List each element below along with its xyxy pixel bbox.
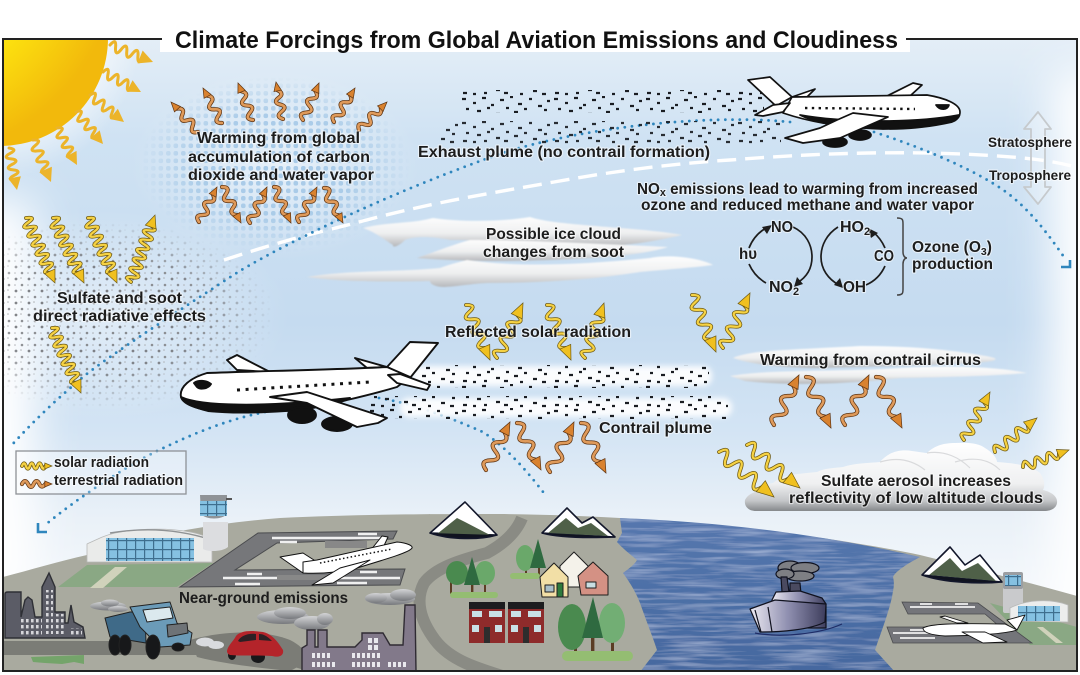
label: NOx emissions: x bbox=[660, 187, 667, 199]
dump truck bbox=[105, 602, 192, 659]
double arrow: stratosphere and troposphere bbox=[1024, 112, 1051, 204]
label: ozone production: production bbox=[912, 256, 993, 273]
right airport plane bbox=[923, 615, 1025, 643]
exhaust plume (no contrail) particles bbox=[441, 90, 781, 144]
right airport grass strip bbox=[1037, 627, 1063, 643]
runway bbox=[180, 531, 405, 587]
label: NOx emissions: ozone and reduced methane and water vapor bbox=[641, 197, 974, 214]
label: ozone production bbox=[912, 239, 993, 273]
label: sulfate and soot bbox=[33, 290, 206, 325]
label: carbon dioxide warming: Warming from global bbox=[197, 130, 360, 147]
airplane: on runway, taking off bbox=[277, 536, 412, 585]
label: near-ground emissions: Near-ground emissions bbox=[179, 590, 348, 607]
label: carbon dioxide warming: dioxide and water vapor bbox=[188, 167, 374, 184]
grass by city bbox=[31, 655, 84, 664]
chemistry cycle: NOx and HOx ozone production: OH bbox=[843, 279, 866, 296]
legend text: solar radiation: solar radiation bbox=[54, 455, 149, 471]
arrows: solar radiation through sulfate and soot bbox=[21, 213, 160, 395]
bracket bbox=[897, 218, 907, 295]
cloud: low altitude reflective cloud bbox=[745, 443, 1057, 511]
chemistry cycle: NOx and HOx ozone production bbox=[739, 219, 894, 298]
trees: group near road bbox=[446, 557, 498, 598]
city skyline bbox=[5, 573, 85, 638]
mountain bbox=[922, 547, 1002, 583]
label: contrail plume: Contrail plume bbox=[599, 420, 712, 437]
chemistry cycle: NOx and HOx ozone production: CO bbox=[874, 248, 894, 265]
legend bbox=[16, 451, 186, 494]
label: sulfate aerosol: reflectivity of low altitude clouds bbox=[789, 490, 1043, 507]
smoke: factory stacks bbox=[257, 607, 333, 630]
smoke: truck bbox=[90, 600, 128, 612]
control tower bbox=[200, 495, 232, 551]
factory bbox=[302, 605, 416, 671]
label: sulfate and soot: Sulfate and soot bbox=[57, 290, 182, 307]
arrows: terrestrial radiation at contrail cirrus bbox=[769, 372, 907, 431]
trees: group by shore bbox=[558, 597, 633, 661]
cloud: possible ice cloud changes bbox=[307, 217, 713, 287]
arrows: terrestrial warming above carbon dioxide text bbox=[168, 81, 390, 135]
label: sulfate aerosol bbox=[789, 473, 1043, 507]
pale glow behind halftones bbox=[0, 70, 420, 420]
legend text: terrestrial radiation: terrestrial radiation bbox=[54, 473, 183, 489]
sun rays bbox=[3, 39, 156, 191]
airplane: lower left bbox=[181, 342, 438, 431]
label: ice cloud changes: Possible ice cloud bbox=[486, 226, 621, 243]
right airport grass bbox=[990, 603, 1077, 645]
label: ozone production: Ozone (O bbox=[912, 239, 981, 256]
label: exhaust plume: Exhaust plume (no contrail formation) bbox=[418, 144, 710, 161]
label: stratosphere: Stratosphere bbox=[988, 134, 1072, 150]
red car bbox=[227, 631, 283, 663]
ground bbox=[3, 514, 1077, 672]
chemistry cycle: NOx and HOx ozone production: 2 bbox=[864, 226, 870, 238]
label: reflected solar radiation: Reflected solar radiation bbox=[445, 324, 631, 341]
chemistry cycle: NOx and HOx ozone production: NO bbox=[771, 219, 793, 236]
right airport runway bbox=[887, 602, 1032, 643]
label: troposphere: Troposphere bbox=[989, 167, 1071, 183]
smoke: car bbox=[196, 638, 224, 649]
label: ozone production: ) bbox=[987, 239, 992, 256]
halftone: carbon dioxide and water vapor bbox=[152, 84, 396, 246]
chemistry cycle: NOx and HOx ozone production: 2 bbox=[793, 286, 799, 298]
dotted transport path: lower plane to ground bbox=[379, 398, 547, 497]
label: carbon dioxide warming: accumulation of carbon bbox=[188, 149, 370, 166]
halftone: sulfate and soot bbox=[4, 224, 268, 406]
arrows: reflected solar radiation bbox=[460, 290, 756, 362]
chemistry cycle: NOx and HOx ozone production: NO bbox=[769, 279, 793, 296]
right airport tower bbox=[1003, 572, 1023, 613]
label: NOx emissions: emissions lead to warming from increased bbox=[666, 181, 978, 198]
dotted transport path: upper plane to upper left bbox=[10, 120, 790, 447]
legend key: terrestrial radiation bbox=[22, 481, 52, 487]
chemistry cycle: NOx and HOx ozone production: hυ bbox=[739, 246, 757, 263]
sun bbox=[4, 40, 118, 164]
mountain bbox=[542, 508, 615, 538]
chemistry cycle: NOx and HOx ozone production: HO bbox=[840, 219, 864, 236]
airport grass bbox=[58, 563, 213, 588]
label: contrail cirrus: Warming from contrail cirrus bbox=[760, 352, 981, 369]
dotted transport path: lower plane to lower left, with arrow bbox=[38, 412, 265, 532]
title: Climate Forcings from Global Aviation Emissions and Cloudiness bbox=[175, 27, 898, 54]
arrows: solar radiation reflected from low clouds bbox=[959, 389, 1071, 472]
road bbox=[3, 518, 522, 675]
airplane: upper right bbox=[748, 77, 960, 147]
ocean bbox=[617, 518, 920, 672]
label: ozone production: 3 bbox=[981, 246, 987, 258]
label: sulfate and soot: direct radiative effects bbox=[33, 308, 206, 325]
dotted transport path: upper plane to right, with arrow bbox=[874, 132, 1070, 267]
red row houses bbox=[469, 602, 544, 643]
label: NOx emissions: NO bbox=[637, 181, 660, 198]
houses bbox=[540, 552, 608, 597]
contrail streaks bbox=[400, 366, 732, 417]
label: carbon dioxide warming bbox=[188, 130, 374, 184]
right airport terminal bbox=[1010, 601, 1068, 622]
ship bbox=[750, 561, 842, 635]
smoke: factory tall chimney bbox=[365, 589, 416, 605]
label: NOx emissions bbox=[637, 181, 978, 214]
label: ice cloud changes bbox=[483, 226, 624, 261]
airport terminal bbox=[87, 529, 212, 562]
label: sulfate aerosol: Sulfate aerosol increases bbox=[821, 473, 1011, 490]
cloud: contrail cirrus bbox=[730, 346, 1027, 384]
stratosphere / troposphere boundary dashed line bbox=[224, 153, 1076, 260]
trees: group by houses bbox=[510, 539, 546, 579]
arrows: terrestrial warming below carbon dioxide text bbox=[196, 185, 346, 225]
title background strip bbox=[160, 30, 910, 52]
legend key: solar radiation bbox=[22, 463, 52, 469]
mountain bbox=[430, 502, 497, 539]
arrows: terrestrial radiation at contrail plume bbox=[481, 420, 611, 476]
contrail plume particles bbox=[369, 365, 728, 419]
arrows: solar radiation into low clouds bbox=[714, 440, 804, 502]
label: ice cloud changes: changes from soot bbox=[483, 244, 624, 261]
